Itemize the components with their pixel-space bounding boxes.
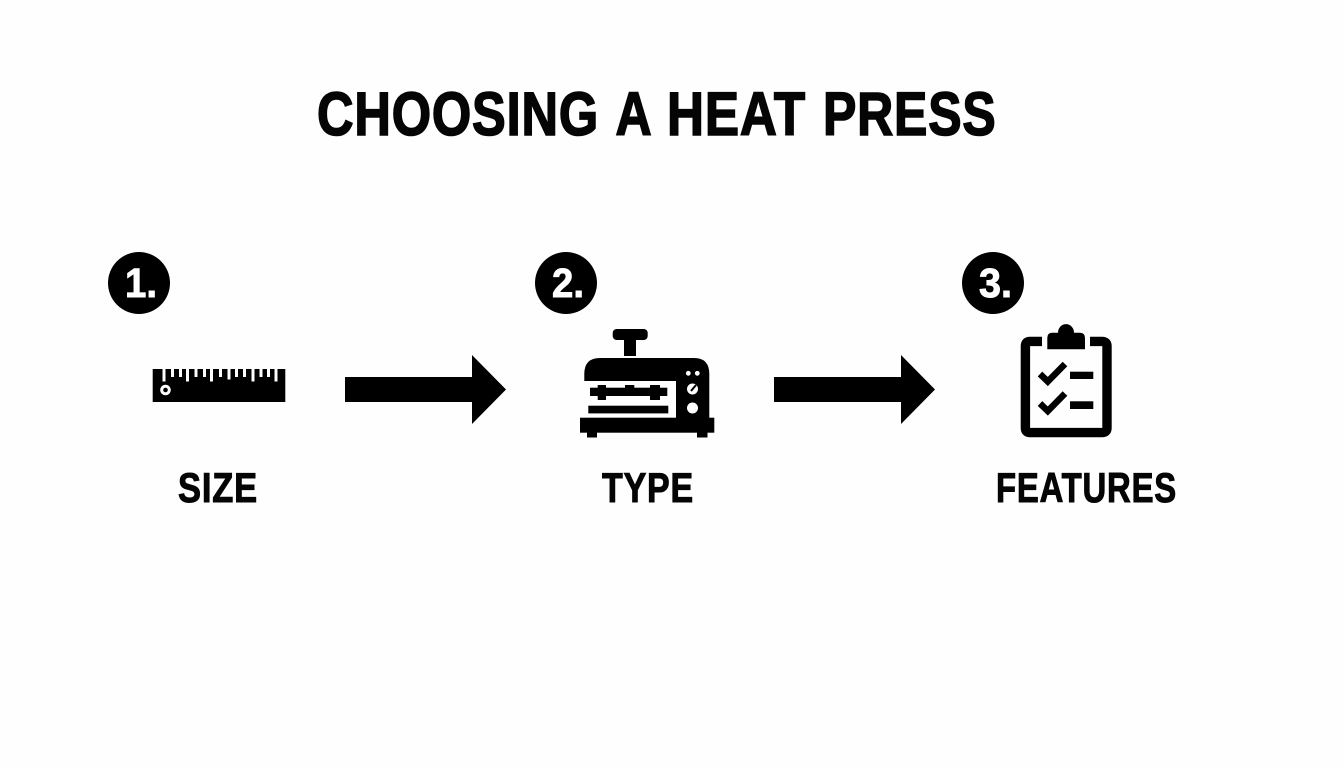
arrow: size to type [345, 355, 506, 424]
label: type: TYPE [602, 464, 694, 511]
title: CHOOSING [317, 80, 599, 148]
step 3: features [962, 252, 1177, 511]
title [317, 80, 996, 148]
step 1: size [108, 252, 285, 511]
number badge 1: 1. [125, 260, 157, 306]
number badge 2: 2. [552, 260, 584, 306]
icon: clipboard checklist [1025, 324, 1107, 433]
arrow: type to features [774, 355, 935, 424]
icon: ruler [153, 369, 285, 402]
title: PRESS [823, 80, 996, 148]
step 2: type [535, 252, 714, 511]
title: A [616, 80, 652, 148]
number badge 2 [535, 252, 597, 314]
icon: heat press [580, 329, 714, 438]
label: size: SIZE [178, 464, 258, 511]
number badge 3 [962, 252, 1024, 314]
label: features: FEATURES [996, 464, 1177, 511]
number badge 1 [108, 252, 170, 314]
number badge 3: 3. [979, 260, 1012, 306]
title: HEAT [667, 80, 806, 148]
